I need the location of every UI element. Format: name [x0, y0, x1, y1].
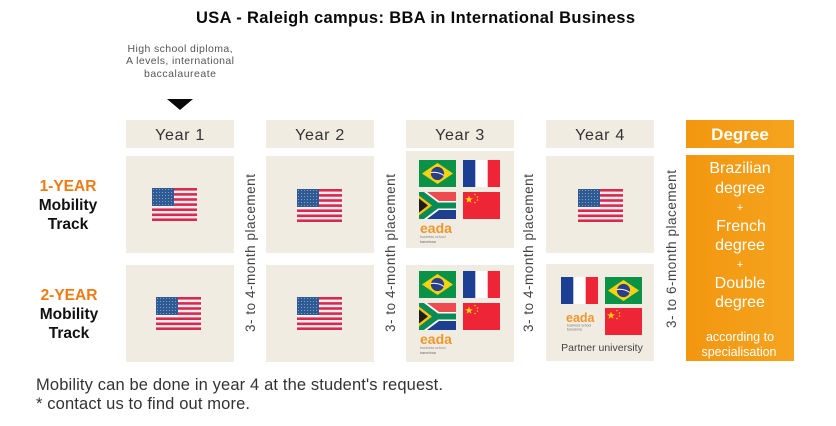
cell: 2-year track, year 4 partner university: business school — [567, 324, 591, 328]
column header: Year 1 — [126, 120, 234, 148]
column header: Year 2: Year 2 — [295, 127, 345, 144]
column header: Year 3 — [406, 120, 514, 148]
panel: degree outcomes: Brazilian — [709, 160, 771, 177]
panel: degree outcomes: Double — [715, 275, 765, 292]
column header: Degree — [686, 120, 794, 148]
cell: 2-year track, year 2 — [266, 265, 374, 362]
row label: 2-year mobility track: 2-YEAR — [41, 287, 97, 304]
column header: Degree: Degree — [711, 125, 769, 144]
cell: 2-year track, year 3: barcelona — [420, 351, 436, 355]
panel: degree outcomes: specialisation — [701, 345, 777, 359]
placement label: years 1-2: 3- to 4-month placement — [243, 174, 258, 332]
panel: degree outcomes: degree — [715, 294, 765, 311]
row label: 2-year mobility track: Mobility — [40, 306, 99, 323]
panel: degree outcomes: degree — [715, 237, 765, 254]
footnote — [36, 376, 443, 413]
row label: 1-year mobility track: Track — [48, 216, 89, 233]
cell: 1-year track, year 4 — [546, 156, 654, 253]
panel: degree outcomes — [686, 155, 794, 361]
cell: 2-year track, year 1 — [126, 265, 234, 362]
column header: Year 4: Year 4 — [575, 127, 625, 144]
placement label: years 3-4: 3- to 4-month placement — [521, 174, 536, 332]
column header: Year 2 — [266, 120, 374, 148]
cell: 2-year track, year 3 — [406, 265, 514, 362]
footnote: * contact us to find out more. — [36, 395, 250, 413]
arrow: entry into year 1 — [167, 99, 193, 110]
panel: degree outcomes: degree — [715, 180, 765, 197]
column header: Year 3: Year 3 — [435, 127, 485, 144]
panel: degree outcomes: French — [716, 218, 766, 235]
cell: 2-year track, year 3: eada — [420, 331, 452, 347]
cell: 2-year track, year 3: business school — [420, 346, 446, 350]
row label: 1-year mobility track — [39, 178, 98, 233]
cell: 1-year track, year 1 — [126, 156, 234, 253]
cell: 1-year track, year 3: business school — [420, 235, 446, 239]
entry requirements text: A levels, international — [126, 55, 234, 67]
row label: 1-year mobility track: 1-YEAR — [40, 178, 96, 195]
cell: 2-year track, year 4 partner university: Partner university — [561, 342, 644, 354]
entry requirements text — [126, 43, 234, 80]
cell: 1-year track, year 3: barcelona — [420, 240, 436, 244]
cell: 1-year track, year 3 — [406, 151, 514, 248]
column header: Year 4 — [546, 120, 654, 148]
panel: degree outcomes: + — [737, 259, 743, 271]
entry requirements text: baccalaureate — [144, 68, 216, 80]
footnote: Mobility can be done in year 4 at the student's request. — [36, 376, 443, 394]
placement label: years 2-3: 3- to 4-month placement — [383, 174, 398, 332]
row label: 2-year mobility track: Track — [49, 325, 90, 342]
cell: 2-year track, year 4 partner university: barcelona — [567, 328, 582, 332]
panel: degree outcomes: according to — [706, 330, 774, 344]
column header: Year 1: Year 1 — [155, 127, 205, 144]
placement label: year 4 to degree: 3- to 6-month placement — [664, 170, 679, 328]
cell: 2-year track, year 4 partner university: eada — [566, 311, 596, 325]
cell: 1-year track, year 2 — [266, 156, 374, 253]
cell: 1-year track, year 3: eada — [420, 220, 452, 236]
cell: 2-year track, year 4 partner university — [546, 264, 654, 361]
title: USA - Raleigh campus: BBA in International Business — [196, 9, 635, 27]
row label: 2-year mobility track — [40, 287, 99, 342]
panel: degree outcomes: + — [737, 202, 743, 214]
row label: 1-year mobility track: Mobility — [39, 197, 98, 214]
entry requirements text: High school diploma, — [128, 43, 232, 55]
